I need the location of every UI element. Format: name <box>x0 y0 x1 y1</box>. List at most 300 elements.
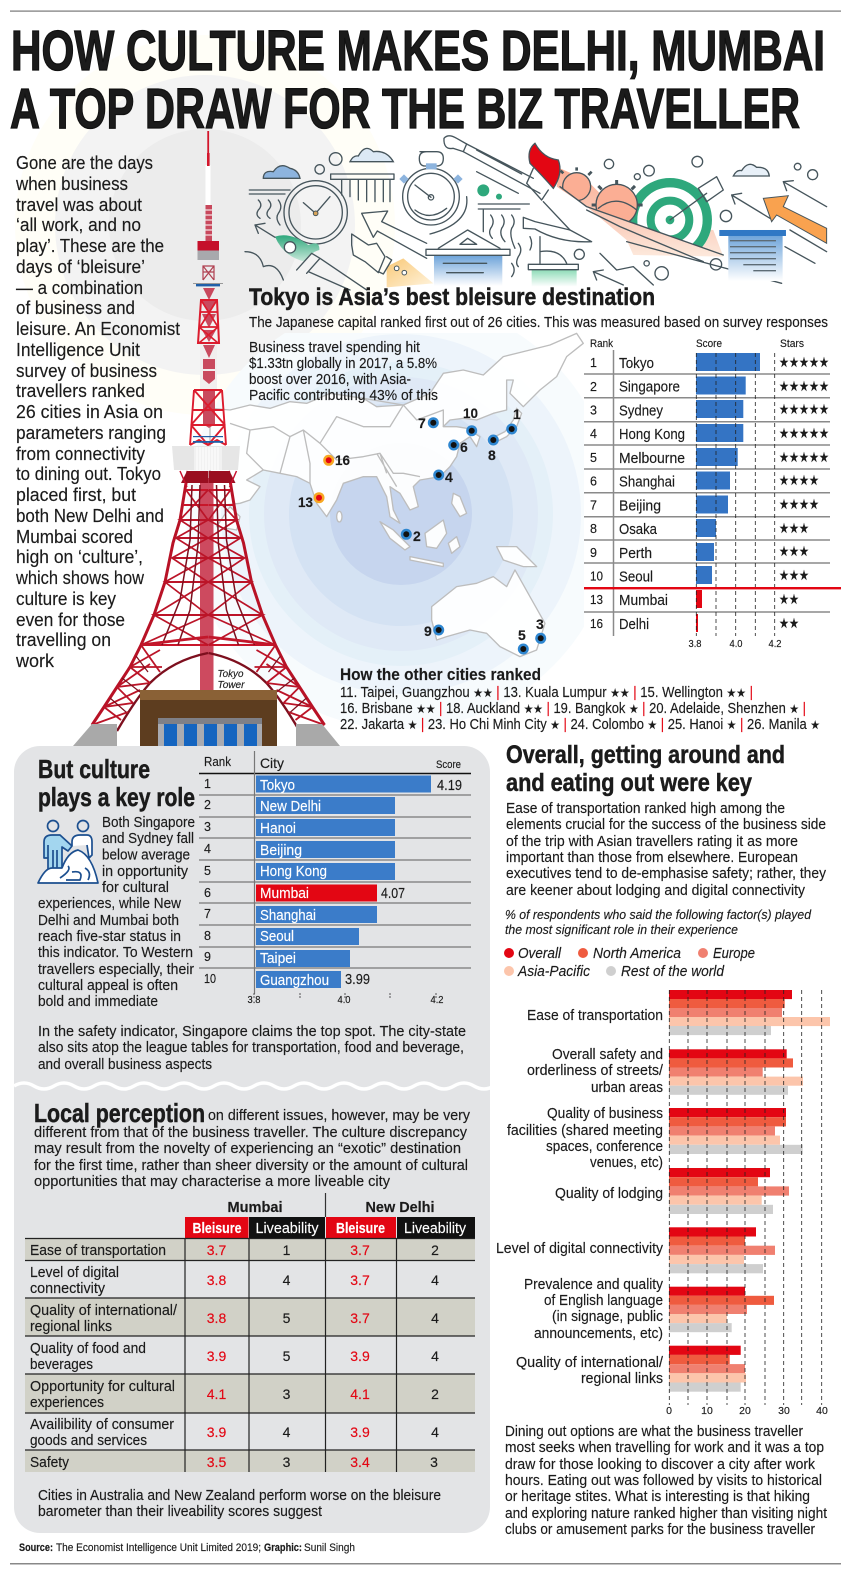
rows: rank and city: 5 <box>590 451 597 465</box>
intro text: travelling on <box>16 630 111 650</box>
table values: 3 <box>283 1454 291 1470</box>
how the other cities ranked: 22. Jakarta ★ | 23. Ho Chi Minh City ★ | 24. Colombo ★ | 25. Hanoi ★ | 26. Manila ★ <box>340 717 820 733</box>
culture bar labels: Seoul <box>260 928 294 945</box>
heading and text: local perception: for the first time, rather than sheer diversity or the amount of cultural <box>34 1158 468 1174</box>
heading and text: local perception <box>34 1098 471 1190</box>
x axis labels: 40 <box>816 1405 828 1417</box>
intro text: of business and <box>16 298 135 318</box>
text: safety indicator: and overall business aspects <box>38 1057 212 1073</box>
table values: 3.9 <box>207 1348 226 1364</box>
star ratings: ★★★ <box>779 568 809 584</box>
legend: Europe <box>713 946 755 962</box>
observation deck <box>172 446 240 470</box>
marker 7 Beijing <box>418 415 439 431</box>
marker 8 Osaka <box>488 434 499 463</box>
intro text: placed first, but <box>16 485 136 505</box>
culture axis: 3.8 <box>248 995 261 1006</box>
table row labels: Safety <box>30 1455 70 1471</box>
culture rank numbers: 5 <box>204 864 211 878</box>
table values: 3.7 <box>350 1242 370 1258</box>
table values: 3.4 <box>350 1454 370 1470</box>
chart: bleisure ranking table: Sydney <box>619 402 663 420</box>
star ratings: ★★★★★ <box>779 355 829 371</box>
rows: rank and city: 1 <box>590 356 597 370</box>
table values: 4 <box>283 1272 291 1288</box>
table values: 4 <box>431 1272 439 1288</box>
marker 3 Sydney <box>535 616 546 644</box>
table headers <box>590 338 804 350</box>
table row labels: Level of digital <box>30 1265 119 1281</box>
table row labels: experiences <box>30 1395 104 1411</box>
text: culture paragraph <box>38 815 195 1010</box>
text: Australia note: Cities in Australia and New Zealand perform worse on the bleisure <box>38 1488 441 1504</box>
intro text: survey of business <box>16 361 157 381</box>
text: ease of transportation paragraph: important than those from elsewhere. European <box>506 850 798 866</box>
intro text <box>15 153 180 671</box>
culture rank numbers <box>204 777 216 986</box>
upper lattice <box>190 288 226 445</box>
chart: factors bar chart <box>496 990 830 1417</box>
rows: rank and city: 13 <box>590 593 603 607</box>
category labels <box>496 1008 664 1387</box>
rows: rank and city: 10 <box>590 570 603 584</box>
chart: bleisure ranking table: Tokyo <box>619 355 654 372</box>
intro text: leisure. An Economist <box>16 319 180 339</box>
intro text: Gone are the days <box>16 153 153 173</box>
marker 9 Perth <box>424 623 444 639</box>
intro text: 26 cities in Asia on <box>16 402 163 422</box>
illustration: business line art left part <box>245 136 540 290</box>
marker 8 Osaka: 8 <box>488 447 496 463</box>
table values: 4 <box>283 1424 291 1440</box>
category labels: Quality of business <box>547 1106 663 1122</box>
rows: rank and city: 9 <box>590 546 597 560</box>
marker 2 Singapore: 2 <box>413 528 421 544</box>
heading and text: local perception: on different issues, however, may be very <box>208 1108 471 1124</box>
text: ease of transportation paragraph: elements crucial for the success of the business side <box>506 817 826 833</box>
heading: but culture plays a key role: But culture <box>38 754 150 784</box>
category labels: Quality of international/ <box>516 1355 664 1371</box>
heading: Tokyo is Asia's best bleisure destination: Tokyo is Asia’s best bleisure destination <box>249 284 655 311</box>
table row labels: Availibility of consumer <box>30 1417 174 1433</box>
group: digital connectivity <box>669 1227 775 1273</box>
table values: 3 <box>283 1386 291 1402</box>
table headers: Stars <box>780 338 804 350</box>
heading: overall, getting around <box>506 741 785 797</box>
intro text: play’. These are the <box>16 236 164 256</box>
culture table headers: Rank <box>204 754 231 769</box>
marker 16 Delhi <box>323 452 350 468</box>
culture bar labels: Guangzhou <box>260 972 329 989</box>
text: ease of transportation paragraph: are keener about lodging and digital connectivity <box>506 883 806 899</box>
table row labels: Ease of transportation <box>30 1243 166 1259</box>
table values: 3.9 <box>350 1424 370 1440</box>
legend: Overall <box>518 946 562 962</box>
text: Australia note <box>38 1488 441 1520</box>
culture bar labels: Tokyo <box>260 777 295 794</box>
star ratings: ★★ <box>779 592 799 608</box>
category labels: facilities (shared meeting <box>507 1123 663 1139</box>
text: ease of transportation paragraph: executives tend to de-emphasise safety; rather, they <box>506 866 827 882</box>
x axis labels: 10 <box>701 1405 713 1417</box>
chart note <box>505 908 812 937</box>
category labels: Prevalence and quality <box>524 1277 664 1293</box>
table values: 3.7 <box>350 1272 370 1288</box>
table values: 4 <box>431 1348 439 1364</box>
intro text: Mumbai scored <box>16 527 133 547</box>
rows: rank and city: 8 <box>590 522 597 536</box>
legend <box>504 946 755 980</box>
table row labels <box>30 1243 178 1471</box>
marker 4 Hong Kong: 4 <box>445 469 453 485</box>
table values: 3.7 <box>207 1242 226 1258</box>
table values: 5 <box>283 1348 291 1364</box>
star ratings: ★★★★ <box>779 497 819 513</box>
heading: overall, getting around: and eating out were key <box>506 769 752 797</box>
marker 16 Delhi: 16 <box>335 452 350 468</box>
group: international links <box>669 1346 746 1392</box>
heading: but culture plays a key role: plays a key role <box>38 782 195 812</box>
culture bar labels: Beijing <box>260 842 302 859</box>
group: overall safety <box>669 1049 803 1095</box>
text: culture paragraph: this indicator. To Western <box>38 945 193 961</box>
marker 10 Seoul: 10 <box>463 405 478 421</box>
rows: rank and city: 3 <box>590 404 597 418</box>
culture rank numbers: 9 <box>204 950 211 964</box>
table values: 3.9 <box>207 1424 226 1440</box>
text: dining out paragraph: and exploring nature ranked higher than visiting night <box>505 1506 827 1522</box>
category labels: urban areas <box>591 1080 663 1096</box>
text: culture paragraph: experiences, while New <box>38 896 181 912</box>
marker 7 Beijing: 7 <box>418 415 426 431</box>
text: dining out paragraph <box>505 1424 827 1538</box>
marker 9 Perth: 9 <box>424 623 432 639</box>
chart: bleisure ranking table: Seoul <box>619 568 653 586</box>
table values: 3 <box>430 1454 438 1470</box>
table values: 4.1 <box>350 1386 370 1402</box>
spending text block <box>249 340 438 404</box>
table row labels: Quality of food and <box>30 1341 146 1357</box>
heading and text: local perception: different from that of the business traveller. The culture discrepancy <box>34 1125 468 1141</box>
text: Australia note: barometer than their liveability scores suggest <box>38 1504 322 1520</box>
chart: bleisure ranking table <box>584 336 841 652</box>
marker 3 Sydney: 3 <box>536 616 544 632</box>
x axis labels: 30 <box>778 1405 790 1417</box>
source line: Source: <box>19 1542 53 1554</box>
intro text: Intelligence Unit <box>16 340 140 360</box>
right lattice half <box>208 471 324 731</box>
chart: bleisure ranking table: Beijing <box>619 498 661 514</box>
star ratings: ★★★ <box>779 521 809 537</box>
culture bar labels: 4.07 <box>381 885 405 902</box>
rows: rank and city: 4 <box>590 427 597 441</box>
table column headers <box>185 1217 475 1238</box>
spire <box>193 131 223 286</box>
spending text block: $1.33tn globally in 2017, a 5.8% <box>249 356 437 372</box>
score axis: 4.2 <box>768 639 782 650</box>
culture table headers <box>204 754 461 771</box>
table values: 5 <box>283 1310 291 1326</box>
legend: North America <box>593 946 681 962</box>
how the other cities ranked: 16. Brisbane ★★ | 18. Auckland ★★ | 19. Bangkok ★ | 20. Adelaide, Shenzhen ★ | <box>340 701 806 717</box>
text: culture paragraph: travellers especially, their <box>38 962 194 978</box>
table city headers: New Delhi <box>366 1199 434 1216</box>
group: English language <box>669 1287 774 1332</box>
how the other cities ranked <box>340 665 820 733</box>
table values: 3.9 <box>350 1348 370 1364</box>
table column headers: Liveability <box>256 1221 319 1237</box>
text: culture paragraph: in opportunity <box>102 864 189 880</box>
culture bar labels <box>260 777 462 989</box>
x axis labels: 20 <box>739 1405 751 1417</box>
culture bar labels: Mumbai <box>260 885 309 902</box>
chart: bleisure ranking table: Delhi <box>619 616 649 633</box>
intro text: to dining out. Tokyo <box>16 464 161 484</box>
chart note: the most significant role in their experience <box>505 923 738 937</box>
score axis: 3.8 <box>688 639 702 650</box>
table row labels: connectivity <box>30 1281 106 1297</box>
text: ease of transportation paragraph: Ease of transportation ranked high among the <box>506 801 785 817</box>
text: dining out paragraph: hours. Eating out was followed by visits to historical <box>505 1473 822 1489</box>
culture bar labels: 3.99 <box>345 971 370 988</box>
land masses <box>210 333 583 657</box>
category labels: regional links <box>581 1371 663 1387</box>
table row labels: regional links <box>30 1319 112 1335</box>
text: dining out paragraph: draw for those looking to discover a city after work <box>505 1457 816 1473</box>
score axis <box>688 639 782 650</box>
category labels: orderliness of streets/ <box>527 1063 664 1079</box>
table values: 3.7 <box>350 1310 370 1326</box>
text: culture paragraph: below average <box>102 848 190 864</box>
intro text: days of ‘bleisure’ <box>16 257 145 277</box>
text: culture paragraph: Both Singapore <box>102 815 195 831</box>
spending text block: boost over 2016, with Asia- <box>249 372 411 388</box>
marker 1 Tokyo <box>506 406 521 434</box>
culture rank numbers: 3 <box>204 820 211 834</box>
background circles behind tower <box>15 35 395 415</box>
culture axis: 4.0 <box>338 995 351 1006</box>
heading and text: local perception: may result from the novelty of experiencing an “exotic” destination <box>34 1141 461 1157</box>
group: lodging <box>669 1168 789 1214</box>
culture bar labels: Taipei <box>260 950 296 967</box>
star ratings <box>779 355 829 632</box>
intro text: parameters ranging <box>16 423 166 443</box>
table column headers: Bleisure <box>192 1221 242 1237</box>
text: culture paragraph: and Sydney fall <box>102 831 194 847</box>
text: culture paragraph: cultural appeal is often <box>38 978 178 994</box>
category labels: Quality of lodging <box>555 1186 663 1202</box>
tower: Tokyo Tower <box>73 131 340 746</box>
intro text: both New Delhi and <box>16 506 164 526</box>
heading: but culture plays a key role <box>38 754 195 812</box>
culture rank numbers: 7 <box>204 907 211 921</box>
text: ease of transportation paragraph: of the trip with Asian travellers rating it as more <box>506 834 798 850</box>
chart: bleisure ranking table: Mumbai <box>619 592 668 609</box>
intro text: culture is key <box>16 589 116 609</box>
category labels: of English language <box>544 1293 663 1309</box>
text: safety indicator: In the safety indicator, Singapore claims the top spot. The city-state <box>38 1024 466 1040</box>
table row labels: Opportunity for cultural <box>30 1379 175 1395</box>
category labels: venues, etc) <box>590 1155 663 1171</box>
category labels: Overall safety and <box>552 1047 663 1063</box>
x axis labels <box>666 1405 828 1417</box>
marker 10 Seoul <box>463 405 478 436</box>
star ratings: ★★★★★ <box>779 379 829 395</box>
chart: bleisure ranking table: Hong Kong <box>619 426 685 443</box>
text: dining out paragraph: Dining out options are what the business traveller <box>505 1424 803 1440</box>
table values <box>207 1242 439 1470</box>
intro text: ‘all work, and no <box>16 215 141 235</box>
text: dining out paragraph: most seeks when travelling for work and it was a top <box>505 1440 824 1456</box>
tower plinths <box>73 724 340 746</box>
icon: people with map <box>38 820 98 883</box>
text: safety indicator <box>38 1024 466 1073</box>
culture rank numbers: 8 <box>204 929 211 943</box>
table values: 2 <box>431 1386 439 1402</box>
culture rank numbers: 6 <box>204 886 211 900</box>
source line: Sunil Singh <box>304 1542 355 1554</box>
category labels: (in signage, public <box>552 1309 663 1325</box>
table column headers: Bleisure <box>336 1221 385 1237</box>
table values: 4 <box>431 1310 439 1326</box>
rows: rank and city <box>590 356 603 631</box>
star ratings: ★★★★★ <box>779 426 829 442</box>
culture bar labels: Shanghai <box>260 907 316 924</box>
category labels: spaces, conference <box>546 1139 663 1155</box>
table values: 4 <box>431 1424 439 1440</box>
marker 5 Melbourne: 5 <box>518 627 526 643</box>
category labels: announcements, etc) <box>534 1326 663 1342</box>
text: culture paragraph: reach five-star status in <box>38 929 181 945</box>
group: ease of transportation <box>669 990 830 1035</box>
table values: 3.8 <box>207 1310 226 1326</box>
heading: overall, getting around: Overall, getting around and <box>506 741 785 769</box>
intro text: work <box>15 651 55 671</box>
culture table headers: Score <box>436 759 461 771</box>
how the other cities ranked: How the other cities ranked <box>340 665 541 684</box>
marker 13 Mumbai: 13 <box>298 494 313 510</box>
culture rank numbers: 1 <box>204 777 211 791</box>
spending text block: Business travel spending hit <box>249 340 420 356</box>
marker 4 Hong Kong <box>433 469 453 485</box>
table row labels: Quality of international/ <box>30 1303 178 1319</box>
culture bar labels: 4.19 <box>437 777 462 794</box>
culture bar labels: New Delhi <box>260 798 321 815</box>
heading and text: local perception: opportunities that may characterise a more liveable city <box>34 1174 391 1190</box>
culture bar labels: Hong Kong <box>260 863 327 880</box>
table city headers: Mumbai <box>228 1199 282 1216</box>
score bars <box>696 353 760 632</box>
text: ease of transportation paragraph <box>506 801 827 899</box>
tower label: Tokyo <box>218 668 244 680</box>
marker 13 Mumbai <box>298 492 324 510</box>
tower label: Tower <box>218 679 245 691</box>
source line: Graphic: <box>264 1542 302 1554</box>
chart: bleisure ranking table: Melbourne <box>619 450 685 467</box>
score axis: 4.0 <box>730 639 743 650</box>
chart: bleisure ranking table: Shanghai <box>619 474 675 490</box>
legend: Rest of the world <box>621 964 725 980</box>
chart: bleisure ranking table: Perth <box>619 545 652 562</box>
culture axis: 4.2 <box>430 995 444 1006</box>
spending text block: Pacific contributing 43% of this <box>249 388 438 404</box>
chart: culture scores <box>199 751 471 1006</box>
text: culture paragraph: for cultural <box>102 880 169 896</box>
intro text: — a combination <box>16 278 143 298</box>
heading and text: local perception: Local perception <box>34 1098 205 1128</box>
table: Mumbai and New Delhi bleisure vs liveability <box>25 1193 475 1472</box>
table values: 4.1 <box>207 1386 226 1402</box>
rows: rank and city: 7 <box>590 498 597 512</box>
panel: culture and local perception <box>14 746 494 1533</box>
table city headers <box>228 1199 434 1216</box>
table row labels: goods and services <box>30 1433 147 1449</box>
text: culture paragraph: bold and immediate <box>38 994 158 1010</box>
intro text: when business <box>15 174 128 194</box>
text: dining out paragraph: or heritage stites. What is interesting is that hiking <box>505 1489 810 1505</box>
marker 5 Melbourne <box>518 627 529 654</box>
intro text: even for those <box>16 610 125 630</box>
intro text: high on ‘culture’, <box>16 547 143 567</box>
source line <box>19 1542 355 1554</box>
table values: 2 <box>431 1242 439 1258</box>
marker 6 Shanghai <box>448 439 468 455</box>
culture bar labels: Hanoi <box>260 820 296 837</box>
culture bars <box>256 776 431 988</box>
title <box>10 19 825 141</box>
table headers: Score <box>696 338 722 350</box>
star ratings: ★★★★★ <box>779 450 829 466</box>
table row labels: beverages <box>30 1357 93 1373</box>
intro text: which shows how <box>15 568 145 588</box>
rows: rank and city: 16 <box>590 617 603 631</box>
intro text: travel was about <box>16 195 142 215</box>
star ratings: ★★★★ <box>779 473 819 489</box>
star ratings: ★★ <box>779 616 799 632</box>
rows: rank and city: 6 <box>590 474 597 488</box>
legend: Asia-Pacific <box>517 964 591 980</box>
intro text: from connectivity <box>16 444 145 464</box>
x axis labels: 0 <box>666 1405 672 1417</box>
left lattice half <box>92 471 208 731</box>
star ratings: ★★★★★ <box>779 402 829 418</box>
concentric spending rings <box>221 333 581 694</box>
text: culture paragraph: Delhi and Mumbai both <box>38 913 179 929</box>
table headers: Rank <box>590 338 613 350</box>
chart: bleisure ranking table: Singapore <box>619 378 680 396</box>
table shaded rows <box>25 1238 475 1472</box>
culture rank numbers: 10 <box>204 972 216 986</box>
map: Asia-Pacific with city markers <box>209 332 584 694</box>
culture axis <box>248 993 444 1006</box>
culture rank numbers: 2 <box>204 798 211 812</box>
table values: 3.5 <box>207 1454 226 1470</box>
chart note: % of respondents who said the following factor(s) played <box>505 908 812 922</box>
star ratings: ★★★ <box>779 544 809 560</box>
rows: rank and city: 2 <box>590 380 597 394</box>
category labels: Ease of transportation <box>527 1008 663 1024</box>
group: business facilities <box>669 1108 803 1154</box>
intro text: travellers ranked <box>16 381 145 401</box>
tower label <box>218 668 245 691</box>
culture table headers: City <box>260 755 284 771</box>
table column headers: Liveability <box>404 1221 467 1237</box>
table values: 1 <box>283 1242 291 1258</box>
source line: The Economist Intelligence Unit Limited 2019; <box>56 1542 261 1554</box>
chart: bleisure ranking table: Osaka <box>619 521 658 538</box>
marker 6 Shanghai: 6 <box>460 439 468 455</box>
category labels: Level of digital connectivity <box>496 1241 664 1257</box>
